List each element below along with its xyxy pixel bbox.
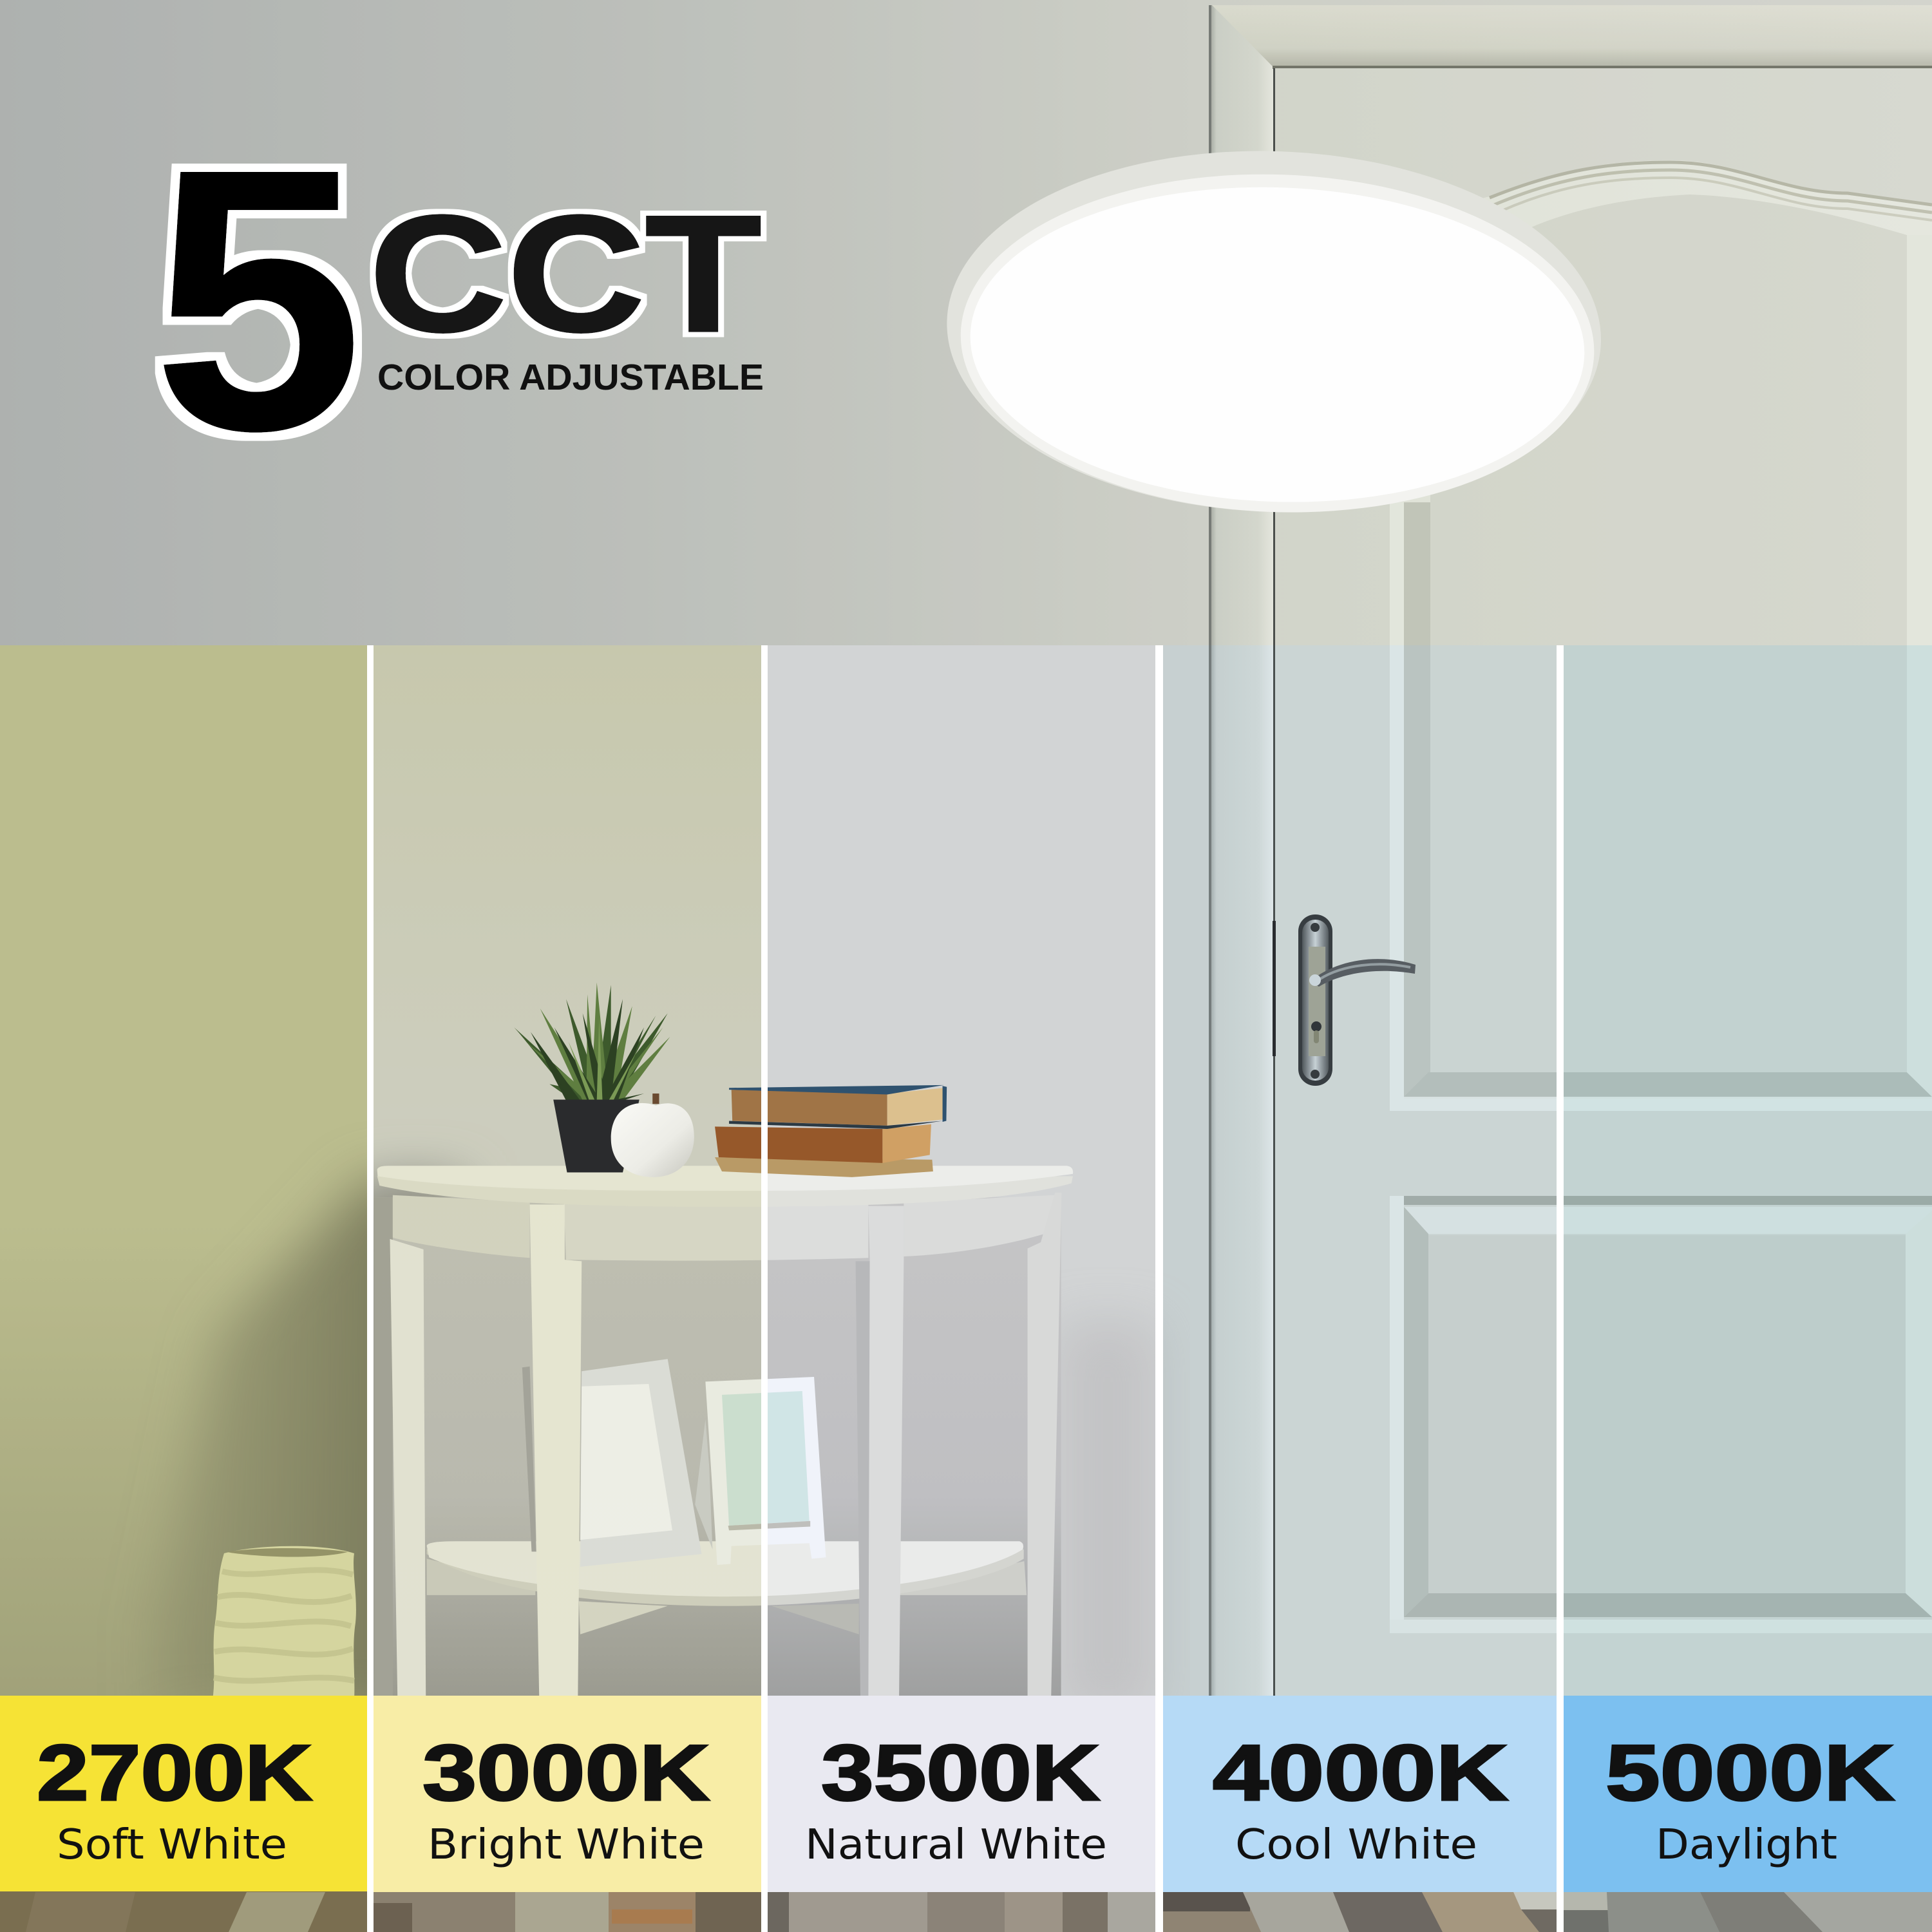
shelf brackets <box>579 1601 668 1634</box>
label: 4000K Cool White: Cool White <box>1235 1821 1477 1869</box>
tint: 4000K column <box>1163 645 1557 1701</box>
label: 4000K Cool White: 4000K <box>1213 1729 1508 1817</box>
door leaf <box>1273 68 1932 1893</box>
table apron <box>393 1195 1055 1261</box>
label: 2700K Soft White: 2700K <box>37 1729 312 1817</box>
floor: 3000K <box>374 1887 761 1932</box>
label: 5000K Daylight <box>1564 1696 1932 1892</box>
floor: 4000K <box>1163 1887 1557 1932</box>
label: 3000K Bright White: 3000K <box>422 1729 710 1817</box>
icon: door handle <box>1273 914 1416 1086</box>
picture frame: silver <box>522 1359 702 1567</box>
icon: white apple <box>611 1094 694 1177</box>
ceiling light <box>941 140 1607 523</box>
wall shadow right of table <box>1056 1320 1159 1719</box>
jamb <box>1210 5 1274 1893</box>
wall shadow <box>153 1180 464 1713</box>
icon: plant <box>514 983 670 1101</box>
table-top objects <box>514 983 947 1177</box>
light housing <box>941 140 1607 523</box>
logo: 5 CCT color adjustable <box>152 91 764 509</box>
wood floor <box>0 1887 1932 1932</box>
light diffuser <box>965 177 1590 513</box>
stacked books <box>715 1085 947 1177</box>
label: 3000K Bright White <box>374 1696 761 1892</box>
label: 5000K Daylight: Daylight <box>1656 1821 1837 1869</box>
right rear leg <box>1028 1193 1061 1696</box>
label: 3500K Natural White: 3500K <box>821 1729 1100 1817</box>
tint: 2700K column <box>0 645 367 1701</box>
console table <box>213 1166 1073 1700</box>
label: 3500K Natural White: Natural White <box>805 1821 1107 1869</box>
label: 4000K Cool White <box>1163 1696 1557 1892</box>
CCT heading: CCT <box>369 180 762 366</box>
arch moulding <box>1490 162 1932 205</box>
subtitle: COLOR ADJUSTABLE <box>377 357 764 398</box>
floor: 5000K <box>1564 1887 1932 1932</box>
tint: top neutral band <box>0 0 1932 645</box>
ceramic vase <box>213 1546 356 1700</box>
numeral 5: 5 <box>152 91 364 509</box>
rear left leg <box>390 1239 426 1696</box>
icon: plant pot <box>553 1100 639 1172</box>
lower shelf <box>427 1541 1024 1606</box>
door frame <box>1209 5 1932 1893</box>
shelf rear rails <box>427 1558 535 1595</box>
wall darkening near floor <box>0 1224 374 1700</box>
tint: 3500K column <box>768 645 1155 1701</box>
front left leg <box>530 1204 582 1696</box>
lower door panel <box>1390 1196 1932 1633</box>
picture frame: white with glass <box>695 1377 826 1565</box>
floor: 2700K <box>0 1887 367 1932</box>
label: 5000K Daylight: 5000K <box>1605 1729 1895 1817</box>
column dividers <box>367 645 1564 1932</box>
table top <box>377 1166 1073 1207</box>
label: 2700K Soft White: Soft White <box>57 1821 287 1869</box>
label: 3000K Bright White: Bright White <box>428 1821 705 1869</box>
tint: 5000K column <box>1564 645 1932 1701</box>
upper door panel <box>1390 160 1932 1111</box>
label: 3500K Natural White <box>768 1696 1155 1892</box>
front right leg <box>856 1206 904 1696</box>
lintel <box>1212 5 1932 66</box>
light rim <box>955 164 1600 523</box>
label: 2700K Soft White <box>0 1696 367 1891</box>
under-table wall <box>374 1197 1061 1696</box>
tint: 3000K column <box>374 645 761 1701</box>
floor: 3500K <box>768 1887 1155 1932</box>
